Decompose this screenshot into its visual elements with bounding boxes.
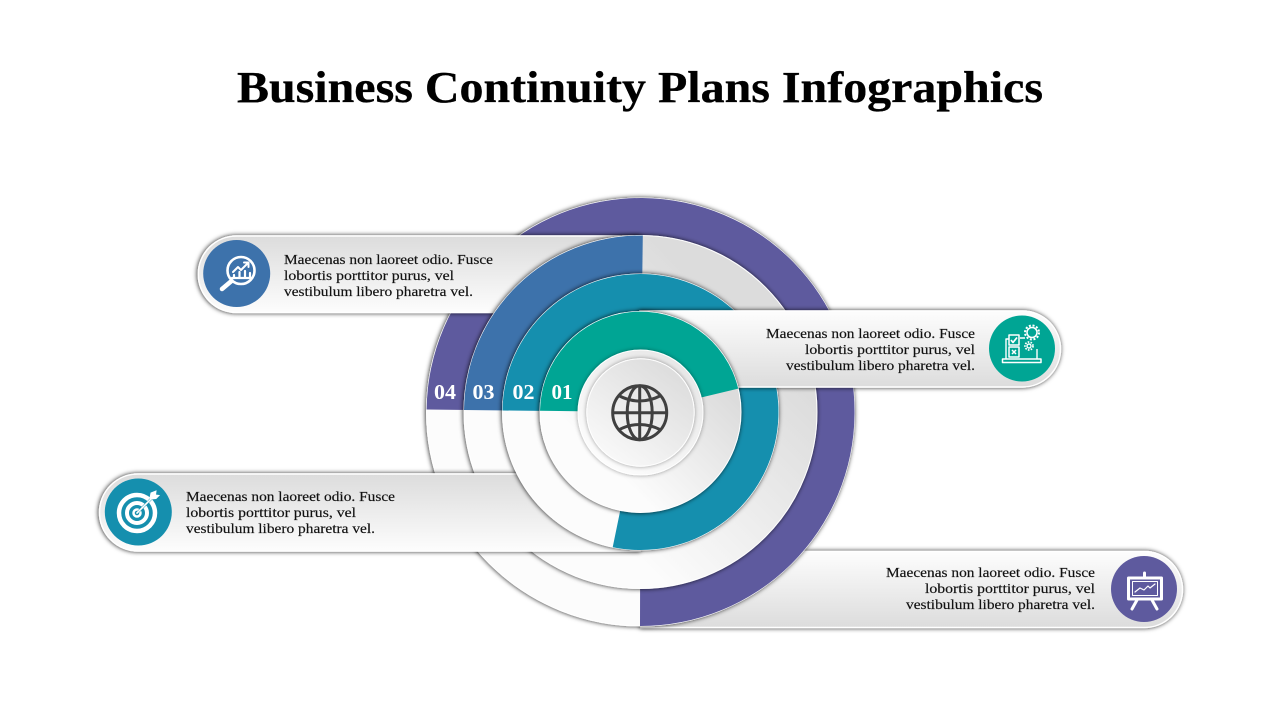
ring 01: green bbox=[540, 312, 741, 512]
text: callout 01: vestibulum libero pharetra vel. bbox=[786, 359, 975, 374]
text: callout 01: Maecenas non laoreet odio. Fusce bbox=[766, 327, 975, 342]
ring 04: purple bbox=[426, 198, 855, 626]
text: callout 02: Maecenas non laoreet odio. Fusce bbox=[186, 490, 395, 505]
callout pill 03: top left bbox=[198, 236, 640, 312]
text: callout 01 bbox=[766, 327, 975, 374]
text: callout 01: lobortis porttitor purus, vel bbox=[805, 343, 975, 358]
text: callout 02: vestibulum libero pharetra vel. bbox=[186, 522, 375, 537]
ring 02: teal blue bbox=[502, 274, 778, 550]
callout pill 04: bottom right bbox=[641, 552, 1182, 628]
title: Business Continuity Plans Infographics bbox=[237, 63, 1043, 112]
icon: magnifier chart bbox=[222, 257, 254, 289]
icon: laptop with gears and checklist bbox=[1002, 326, 1041, 362]
text: callout 04 bbox=[886, 566, 1095, 613]
callout pill 02: left bbox=[100, 474, 640, 551]
text: callout 03 bbox=[284, 253, 493, 300]
text: callout 04: Maecenas non laoreet odio. Fusce bbox=[886, 566, 1095, 581]
icon: presentation board bbox=[1128, 573, 1162, 609]
text: callout 03: lobortis porttitor purus, vel bbox=[284, 269, 454, 284]
ring 01: green: 01 bbox=[552, 380, 572, 404]
icon: target with arrow bbox=[119, 491, 159, 531]
text: callout 02 bbox=[186, 490, 395, 537]
callout pill 01: right bbox=[640, 311, 1060, 387]
text: callout 03: vestibulum libero pharetra vel. bbox=[284, 285, 473, 300]
center hub bbox=[578, 350, 703, 475]
icon: globe bbox=[613, 386, 667, 440]
ring 03: blue bbox=[464, 235, 817, 588]
text: callout 03: Maecenas non laoreet odio. Fusce bbox=[284, 253, 493, 268]
ring 04: purple: 04 bbox=[434, 380, 457, 404]
ring 03: blue: 03 bbox=[472, 380, 494, 404]
ring 02: teal blue: 02 bbox=[512, 380, 534, 404]
text: callout 04: vestibulum libero pharetra vel. bbox=[906, 598, 1095, 613]
text: callout 02: lobortis porttitor purus, vel bbox=[186, 506, 356, 521]
text: callout 04: lobortis porttitor purus, vel bbox=[925, 582, 1095, 597]
